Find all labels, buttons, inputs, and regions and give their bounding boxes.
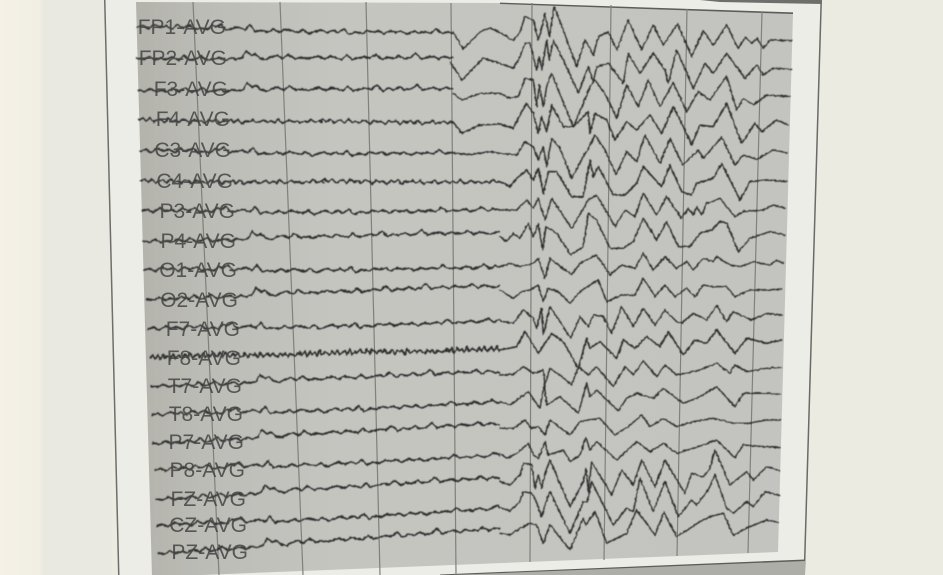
trace: F7 xyxy=(148,306,782,338)
trace: O2 xyxy=(147,278,782,303)
channel labels: CZ-AVG xyxy=(169,514,247,537)
channel labels: FZ-AVG xyxy=(171,488,246,511)
channel labels: F8-AVG xyxy=(167,347,241,370)
trace: FZ xyxy=(156,450,780,507)
channel labels: T8-AVG xyxy=(169,403,243,426)
trace: C4 xyxy=(141,160,787,200)
trace: PZ xyxy=(158,510,778,554)
channel labels: F4-AVG xyxy=(156,108,230,131)
trace: F3 xyxy=(138,73,790,127)
trace: P4 xyxy=(143,213,785,255)
trace: P8 xyxy=(155,438,780,474)
channel labels: P3-AVG xyxy=(160,200,235,223)
channel labels: P7-AVG xyxy=(169,431,244,454)
trace: P3 xyxy=(142,193,785,228)
printed page xyxy=(104,0,822,575)
trace: T7 xyxy=(151,361,782,387)
channel labels: PZ-AVG xyxy=(171,541,248,564)
EEG chart panel xyxy=(136,2,793,575)
channel labels: C3-AVG xyxy=(154,139,231,162)
trace: P7 xyxy=(153,415,780,444)
channel labels: C4-AVG xyxy=(156,170,233,193)
channel labels: F7-AVG xyxy=(166,318,240,341)
trace: FP1 xyxy=(137,7,792,67)
channel labels: P8-AVG xyxy=(170,459,245,482)
EEG traces xyxy=(137,7,792,554)
channel labels: FP2-AVG xyxy=(139,47,227,70)
channel labels: P4-AVG xyxy=(161,230,236,253)
trace: F8 xyxy=(150,330,782,368)
channel labels xyxy=(138,16,248,564)
trace: FP2 xyxy=(137,40,792,93)
trace: C3 xyxy=(140,135,787,178)
trace: T8 xyxy=(152,383,780,419)
trace: CZ xyxy=(157,474,780,533)
trace: O1 xyxy=(144,253,783,278)
channel labels: O2-AVG xyxy=(160,289,238,312)
channel labels: F3-AVG xyxy=(154,78,228,101)
trace: F4 xyxy=(139,103,788,145)
channel labels: O1-AVG xyxy=(159,259,237,282)
channel labels: FP1-AVG xyxy=(138,16,226,39)
channel labels: T7-AVG xyxy=(168,375,242,398)
photo of EEG page xyxy=(104,0,822,575)
